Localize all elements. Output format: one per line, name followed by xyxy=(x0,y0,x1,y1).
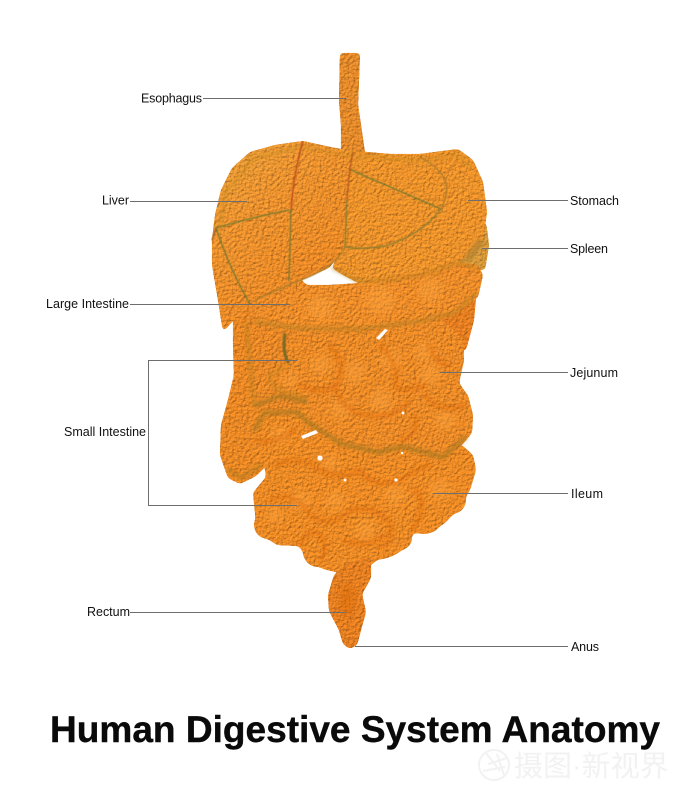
ascending colon xyxy=(220,305,270,484)
title: Human Digestive System Anatomy xyxy=(50,709,660,750)
label: liver: Liver xyxy=(102,194,129,208)
transverse large intestine xyxy=(246,262,483,330)
intestinal folds xyxy=(255,345,465,560)
left lobe of liver over stomach xyxy=(343,150,447,249)
spleen xyxy=(455,222,489,270)
rectum leader xyxy=(130,612,345,614)
label: anus: Anus xyxy=(571,640,599,654)
watermark xyxy=(479,750,669,783)
descending colon xyxy=(415,285,477,356)
ileum xyxy=(251,400,476,574)
esophagus xyxy=(339,53,366,160)
ileum leader xyxy=(433,492,568,494)
liver xyxy=(212,141,352,332)
small bright gaps between intestines xyxy=(301,329,404,482)
label: small intestine: Small Intestine xyxy=(64,425,146,439)
label: spleen: Spleen xyxy=(570,242,608,256)
liver leader xyxy=(130,200,247,202)
watermark icon xyxy=(479,750,509,780)
esophagus leader xyxy=(203,98,346,100)
organ boundary shading xyxy=(219,147,480,478)
label: rectum: Rectum xyxy=(87,605,130,619)
organ seams xyxy=(212,142,447,362)
label: stomach: Stomach xyxy=(570,194,619,208)
small intestine bracket xyxy=(148,360,297,506)
label: large intestine: Large Intestine xyxy=(46,297,129,311)
colon inner strip xyxy=(247,305,315,425)
organ labels xyxy=(46,92,619,654)
jejunum leader xyxy=(440,372,568,374)
jejunum xyxy=(266,318,473,457)
stomach xyxy=(332,149,487,286)
label: ileum: Ileum xyxy=(571,487,603,501)
watermark text: 摄图·新视界 xyxy=(514,750,669,783)
stomach leader xyxy=(468,200,568,202)
rectum centre shading xyxy=(339,582,355,618)
rectum xyxy=(328,556,371,649)
label: jejunum: Jejunum xyxy=(570,366,618,380)
label: esophagus: Esophagus xyxy=(141,92,202,106)
leader lines xyxy=(130,98,568,646)
intestinal highlights xyxy=(267,278,455,540)
large intestine leader xyxy=(130,304,290,306)
spleen leader xyxy=(482,248,568,250)
anatomy illustration: digestive organs xyxy=(212,53,489,649)
anus leader xyxy=(355,646,568,648)
